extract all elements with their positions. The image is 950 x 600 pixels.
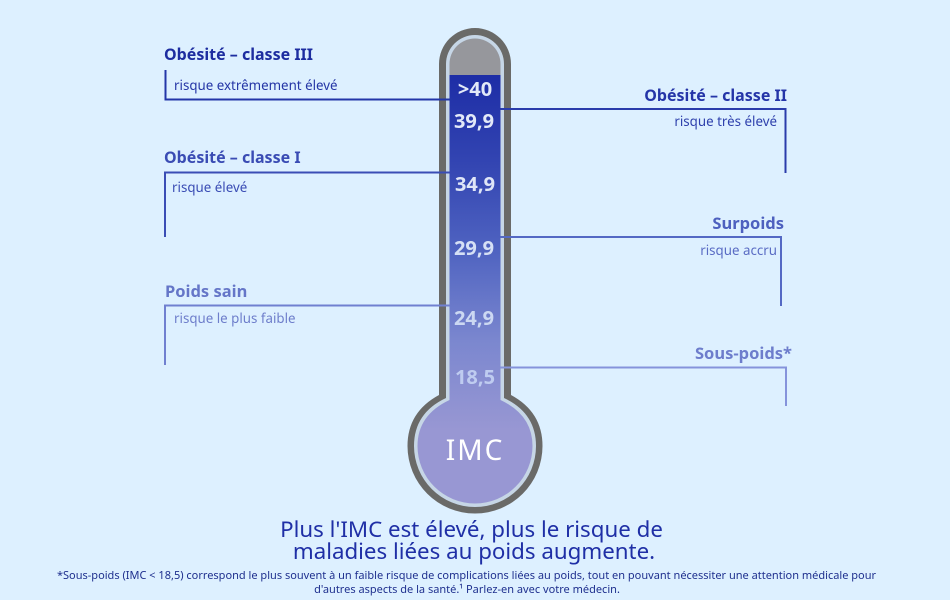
category: Surpoids <box>500 211 784 306</box>
risk text: risque le plus faible <box>174 309 296 327</box>
heading: Surpoids <box>712 211 784 234</box>
value: 18,5: 18,5 <box>455 363 495 390</box>
heading: Obésité – classe III <box>164 43 313 65</box>
main message: Plus l'IMC est élevé, plus le risque de <box>280 513 663 544</box>
empty top of tube <box>450 39 500 76</box>
footnote <box>57 568 877 597</box>
category: Obésité classe II <box>500 84 787 173</box>
heading: Poids sain <box>165 279 247 302</box>
heading: Obésité – classe I <box>164 146 301 168</box>
category: Obésité classe I <box>164 146 450 237</box>
connector <box>500 237 781 306</box>
connector <box>500 368 786 406</box>
risk text: risque extrêmement élevé <box>174 76 338 94</box>
thermometer glass rim <box>414 35 536 507</box>
main message <box>280 513 663 566</box>
risk text: risque très élevé <box>674 112 777 130</box>
thermometer outer casing <box>408 28 542 514</box>
heading: Obésité – classe II <box>644 84 787 106</box>
value: 24,9: 24,9 <box>454 304 494 331</box>
connector <box>165 172 450 237</box>
main message: maladies liées au poids augmente. <box>293 535 655 566</box>
heading: Sous-poids* <box>695 341 792 364</box>
connector <box>500 109 786 173</box>
thermometer <box>408 28 542 514</box>
connector <box>166 70 452 100</box>
risk text: risque accru <box>700 241 777 259</box>
value: 29,9: 29,9 <box>454 234 494 261</box>
value: 39,9: 39,9 <box>454 107 494 134</box>
category: Obésité classe III <box>164 43 452 100</box>
value: >40: >40 <box>458 75 492 102</box>
value: 34,9: 34,9 <box>455 170 495 197</box>
connector <box>165 306 450 365</box>
bulb label IMC: IMC <box>446 431 504 469</box>
category: Poids sain <box>165 279 450 365</box>
footnote: *Sous-poids (IMC < 18,5) correspond le plus souvent à un faible risque de complications liées au poids, tout en pouvant nécessiter une attention médicale pour <box>57 568 877 583</box>
mercury column and bulb <box>418 75 532 503</box>
category: Sous-poids <box>500 341 792 406</box>
footnote: d'autres aspects de la santé.¹ Parlez-en avec votre médecin. <box>314 582 620 597</box>
risk text: risque élevé <box>172 178 247 196</box>
